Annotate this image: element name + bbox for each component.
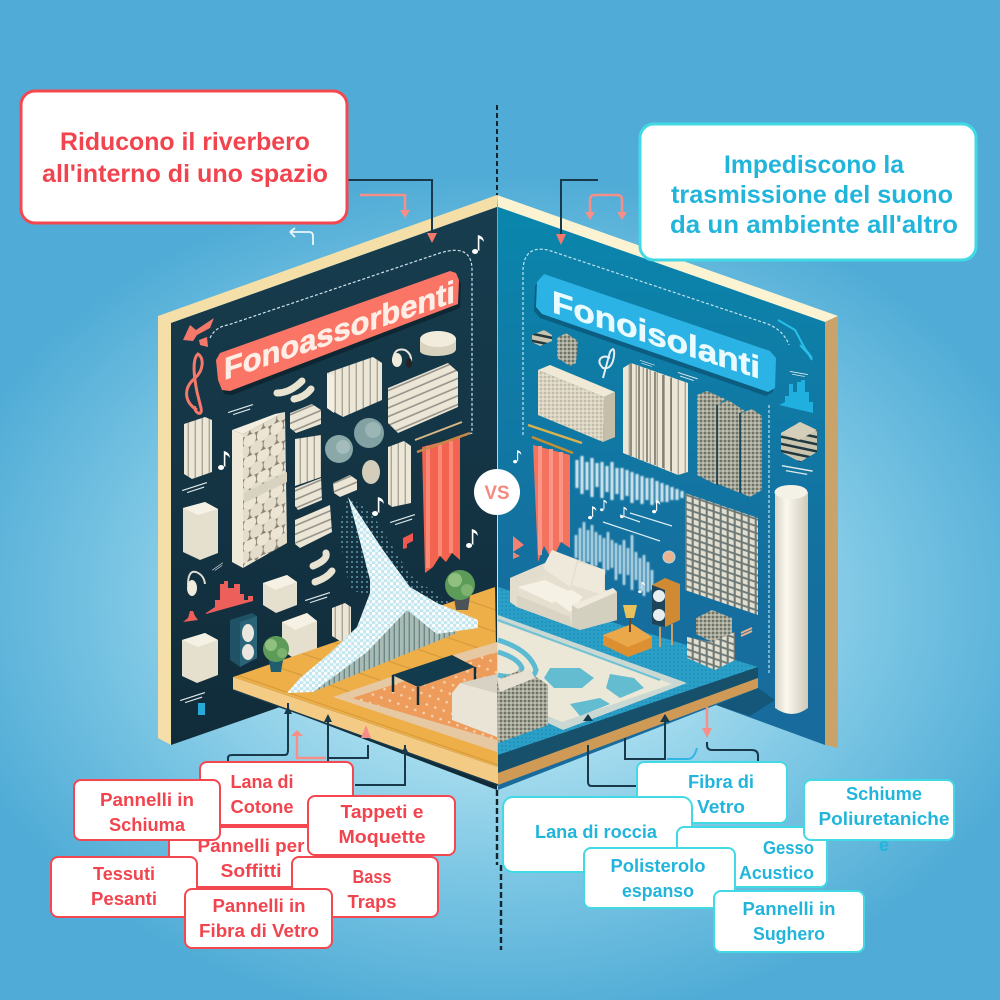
rug left [333,642,497,752]
callout: impediscono la trasmissione [640,124,976,260]
label: Pannelli in Fibra di Vetro: Pannelli in [212,895,306,916]
side table and lamp [603,605,652,657]
coffee table [392,655,475,705]
foam ribbed left [332,603,351,641]
foam: spiky spheres [325,418,384,463]
foam: cubes [182,502,317,683]
label: Tessuti Pesanti: Pesanti [91,888,157,909]
micro text marks left [180,404,416,704]
icon: coral arrows [183,318,214,347]
cyan bar chart [779,380,813,413]
dashed guide line [210,250,472,446]
floor blue [498,587,775,785]
foam: ribbed speckled panel [623,363,688,475]
foam: small stack [290,404,321,433]
foam: cylinder [774,485,808,714]
label: Bass Traps: Bass [352,866,392,887]
icon: blue tag [198,703,205,715]
label: Polisterolo espanso [584,848,735,908]
foam: curved pills [277,381,311,399]
callout: riduconoil riverbero [21,91,347,223]
tag coral [741,628,752,636]
foam: ribbed and layered column [295,435,332,548]
icon: headphones [392,350,412,368]
label: Pannelli in Schiuma [74,780,220,840]
label: Tappeti e Moquette [308,796,455,855]
sound wave upper [577,456,682,505]
sofa right [510,550,617,630]
foam: small stack centre [333,475,357,497]
icon: coral play [513,536,524,559]
callout: impediscono la trasmissione: trasmissione del suono [671,181,953,209]
label: Pannelli per Soffitti: Soffitti [220,860,282,881]
label: Pannelli in Schiuma: Pannelli in [100,789,194,810]
panel: right wall fonoisolanti [497,195,838,790]
label: Polisterolo espanso: espanso [622,880,694,901]
panel: left wall fonoassorbenti [158,195,497,790]
label: Bass Traps: Traps [348,891,396,912]
bar chart coral [183,581,253,622]
label: Pannelli in Sughero: Sughero [753,923,825,944]
label: Fibra di Vetro: Vetro [697,796,745,817]
banner: Fonoisolanti: Fonoisolanti [552,284,760,386]
label: Schiume Poliuretaniche [804,780,954,855]
dashed guide line [523,249,789,675]
label: Pannelli per Soffitti: Pannelli per [198,835,304,856]
foam: layered panel [388,363,458,433]
label: Schiume Poliuretaniche: e [879,834,889,855]
wall surface and edge [158,195,497,790]
label: Tessuti Pesanti: Tessuti [93,863,155,884]
label: Lana di roccia: Lana di roccia [535,821,658,842]
foam: speckled block [538,365,615,442]
small stack and cube [532,330,578,366]
foam: disc [420,331,456,356]
label: Gesso Acustico: Gesso [763,837,814,858]
annotation lines [603,513,672,541]
label: Lana di roccia [503,797,692,872]
floor left with rug and furniture [233,497,548,785]
label: Tappeti e Moquette: Moquette [338,826,426,847]
foam: grid panel [685,493,758,615]
callout: impediscono la trasmissione: Impediscono la [724,151,905,179]
callout: impediscono la trasmissione: da un ambiente all'altro [670,211,958,239]
foam: grey columns [697,391,762,497]
label: Schiume Poliuretaniche: Poliuretaniche [818,808,950,829]
micro text marks right [639,360,813,476]
label: Pannelli in Schiuma: Schiuma [109,814,186,835]
icon: target [663,551,675,563]
bottom connectors left [228,703,409,785]
sofa left [452,674,497,737]
label: Gesso Acustico: Acustico [739,862,814,883]
sound foam wave [287,497,478,693]
absorption fan [313,608,457,692]
plant right [445,570,475,610]
icon: headphones note [599,349,614,378]
icons: music notes [513,450,660,593]
speaker [230,613,257,667]
layered stack right [781,422,817,462]
foam: ribbed panel right [388,441,411,507]
label: Pannelli in Sughero: Pannelli in [742,898,836,919]
foam: egg crate panel [232,412,287,568]
label: Tessuti Pesanti [51,857,197,917]
label: Lana di Cotone [200,762,353,825]
icon: treble clef [187,354,202,413]
icon: cyan arrows [778,320,812,360]
sofa grey right of corner [497,669,548,743]
label: Pannelli per Soffitti [169,827,316,887]
banner: Fonoisolanti [534,274,776,396]
foam: tall ribbed panel [184,417,212,479]
speaker right [652,578,680,647]
icon: coral flag [403,533,413,549]
label: Bass Traps [292,857,438,917]
curtain left [415,422,470,573]
sound wave lower [576,522,652,596]
foam: stacked cubes [687,610,735,670]
VS badge: VS [484,483,510,504]
label: Gesso Acustico [677,827,827,887]
label: Tappeti e Moquette: Tappeti e [340,801,424,822]
wall surface and edge [497,195,838,790]
plant left [263,636,289,672]
bottom connectors right [583,707,758,786]
label: Schiume Poliuretaniche: Schiume [846,783,922,804]
banner: Fonoassorbenti: Fonoassorbenti [224,274,455,387]
top connectors left [290,180,437,245]
curtain right [528,425,582,562]
rug right [498,615,687,730]
foam: curved pills lower [313,553,332,582]
callout: riduconoil riverbero: all'interno di uno spazio [42,160,328,188]
icon: headphones lower [187,572,205,596]
central dashed divider [497,105,501,950]
icons: music notes [218,235,484,548]
label: Fibra di Vetro: Fibra di [688,771,754,792]
foam: ribbed panel [327,357,382,417]
label: Lana di Cotone: Cotone [230,796,294,817]
callout: riduconoil riverbero: Riducono il riverbero [60,128,310,156]
label: Pannelli in Fibra di Vetro: Fibra di Vetro [199,920,319,941]
wood floor [233,587,498,785]
top connectors right [556,180,627,245]
VS badge [474,469,520,515]
label: Polisterolo espanso: Polisterolo [610,855,706,876]
label: Pannelli in Fibra di Vetro [185,889,332,948]
label: Lana di Cotone: Lana di [230,771,294,792]
foam: disc small [362,460,380,484]
label: Pannelli in Sughero [714,891,864,952]
label: Fibra di Vetro [637,762,787,823]
sound dispersion halo [338,497,455,610]
